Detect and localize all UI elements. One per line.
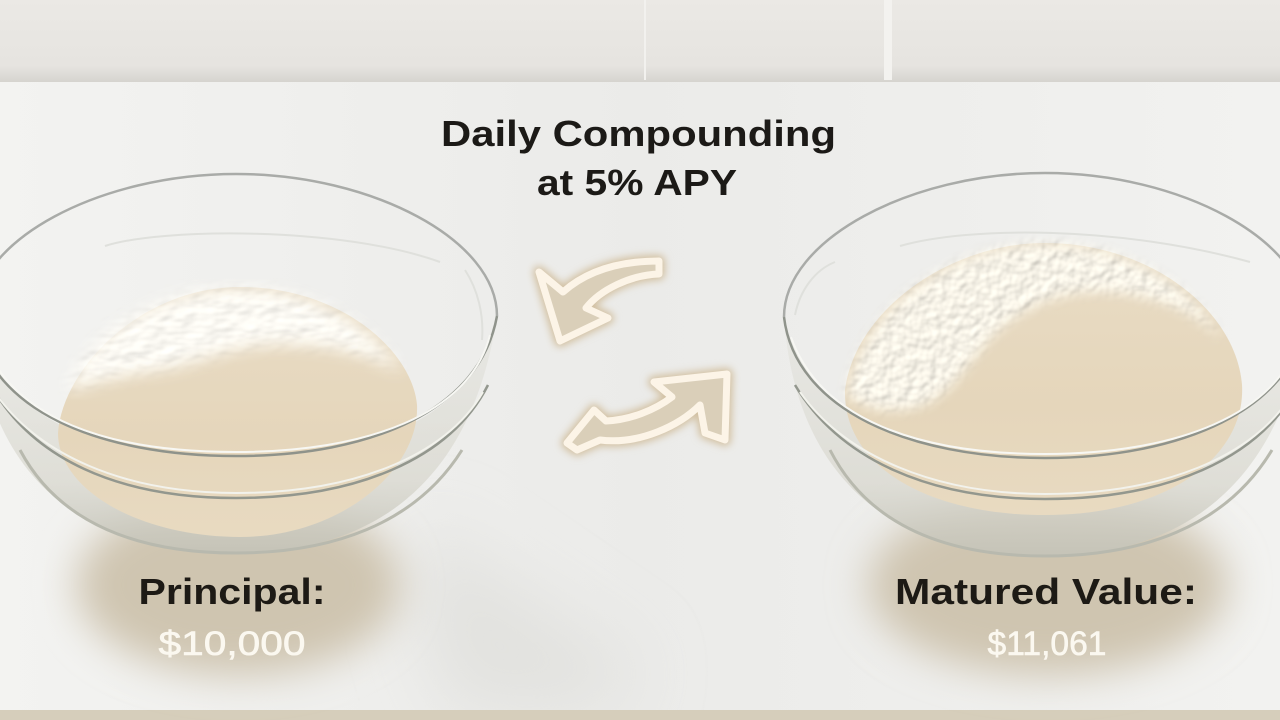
right glass bowl with dough bbox=[784, 173, 1280, 556]
dough: matured value bbox=[845, 243, 1242, 515]
arrow: growth to matured value bbox=[567, 374, 727, 450]
label: matured value bbox=[895, 571, 1197, 663]
label: principal bbox=[138, 571, 326, 663]
glass rim left bbox=[0, 174, 497, 553]
left glass bowl with dough bbox=[0, 174, 497, 553]
glass rim right bbox=[784, 173, 1280, 556]
background wall bbox=[0, 0, 1280, 82]
bowl shadows bbox=[76, 495, 1228, 675]
dough: principal bbox=[58, 287, 417, 537]
bowl body left bbox=[0, 316, 497, 553]
value: matured amount: $11,061 bbox=[988, 625, 1106, 663]
label: principal: Principal: bbox=[138, 571, 326, 612]
title: at 5% APY bbox=[537, 162, 737, 203]
flour highlight right bbox=[846, 243, 1222, 411]
value: principal amount: $10,000 bbox=[158, 625, 306, 663]
title: Daily Compounding bbox=[441, 113, 836, 154]
title bbox=[441, 113, 836, 203]
flour highlight left bbox=[66, 287, 402, 392]
bowl body right bbox=[784, 317, 1280, 556]
arrow: returning to principal bbox=[539, 261, 659, 341]
label: matured value: Matured Value: bbox=[895, 571, 1197, 612]
